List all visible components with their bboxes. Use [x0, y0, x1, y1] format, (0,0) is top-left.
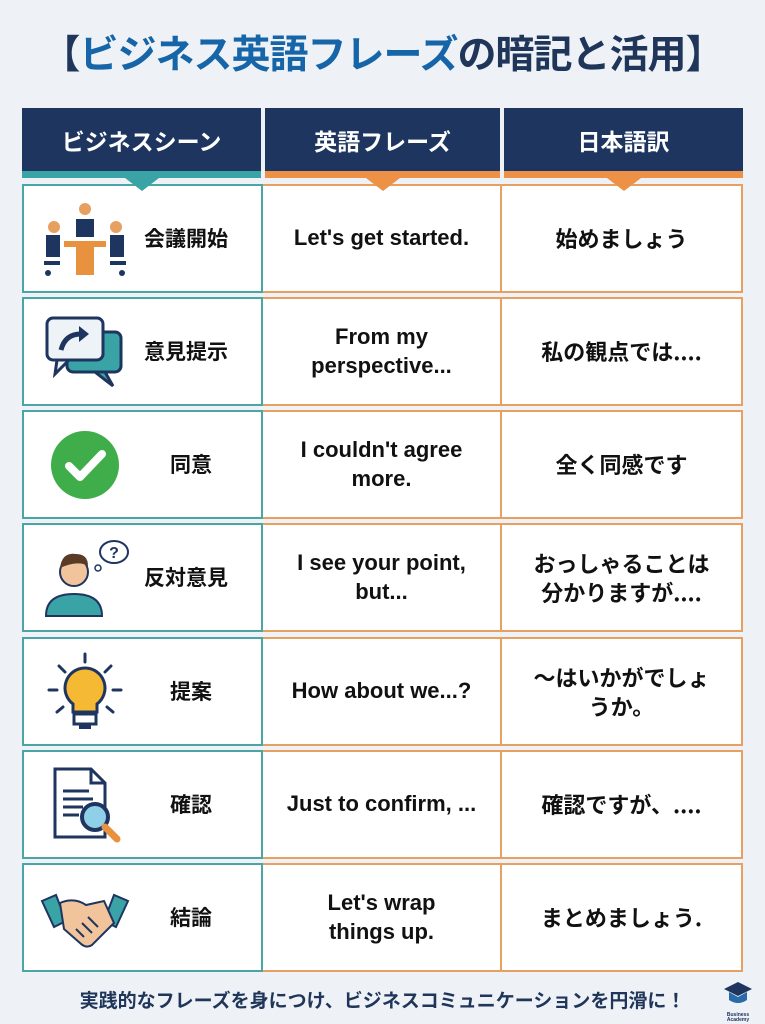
row 4 japanese: 分かりますが.... — [541, 576, 702, 608]
row 5 scene: 提案 — [170, 676, 212, 706]
icon: check — [51, 431, 119, 499]
row 5 japanese: ～はいかがでしょ — [533, 661, 710, 693]
row 5 scene — [22, 637, 263, 746]
row 4 scene — [22, 523, 263, 632]
row 6 scene — [22, 750, 263, 859]
icon: light bulb — [48, 652, 122, 729]
row 6 japanese: 確認ですが、.... — [541, 788, 702, 820]
row 4 japanese: おっしゃることは — [533, 547, 710, 579]
row 7 english: things up. — [329, 918, 434, 944]
row 7 scene — [22, 863, 263, 972]
row 7 japanese — [502, 863, 743, 972]
row 2 english: perspective... — [311, 352, 452, 378]
logo: Business Academy — [727, 1012, 749, 1023]
row 4 english — [263, 523, 502, 632]
row 1 japanese: 始めましょう — [555, 222, 688, 254]
row 1 english — [263, 184, 502, 293]
row 2 english: From my — [335, 324, 428, 349]
row 3 japanese: 全く同感です — [555, 448, 688, 480]
row 6 scene: 確認 — [170, 789, 212, 819]
row 6 english — [263, 750, 502, 859]
row 3 scene: 同意 — [170, 449, 212, 479]
row 2 english — [263, 297, 502, 406]
icon: person thinking: ? — [109, 544, 119, 562]
row 3 english: I couldn't agree — [301, 437, 462, 462]
icon: handshake — [40, 894, 130, 948]
icon: meeting — [44, 203, 126, 276]
row 5 japanese — [502, 637, 743, 746]
row 3 english: more. — [352, 466, 411, 490]
icon: speech bubbles — [46, 316, 122, 388]
row 3 japanese — [502, 410, 743, 519]
header: japanese: 日本語訳 — [578, 123, 670, 157]
row 5 english — [263, 637, 502, 746]
row 4 scene: 反対意見 — [144, 562, 228, 592]
header: english phrase — [265, 108, 500, 178]
icon: person thinking — [45, 540, 129, 617]
row 5 japanese: うか。 — [589, 690, 654, 722]
row 1 scene: 会議開始 — [144, 223, 228, 253]
icon: document magnifier — [54, 768, 120, 842]
row 5 english: How about we...? — [292, 678, 471, 703]
row 6 english: Just to confirm, ... — [287, 791, 476, 816]
row 1 japanese — [502, 184, 743, 293]
row 2 scene: 意見提示 — [144, 336, 228, 366]
logo — [724, 982, 752, 1023]
row 3 scene — [22, 410, 263, 519]
header: japanese — [504, 108, 743, 178]
header: english phrase: 英語フレーズ — [314, 123, 451, 157]
row 4 english: I see your point, — [297, 550, 466, 575]
row 7 english: Let's wrap — [328, 890, 435, 915]
row 1 english: Let's get started. — [294, 225, 469, 250]
row 2 scene — [22, 297, 263, 406]
header: business scene — [22, 108, 261, 178]
row 4 english: but... — [355, 578, 408, 604]
header: business scene: ビジネスシーン — [62, 123, 221, 157]
row 6 japanese — [502, 750, 743, 859]
title: 【ビジネス英語フレーズの暗記と活用】 — [41, 24, 724, 80]
row 3 english — [263, 410, 502, 519]
row 2 japanese: 私の観点では.... — [541, 335, 702, 367]
row 7 english — [263, 863, 502, 972]
row 7 japanese: まとめましょう. — [541, 901, 702, 933]
row 2 japanese — [502, 297, 743, 406]
row 7 scene: 結論 — [170, 902, 212, 932]
row 1 scene — [22, 184, 263, 293]
footer tagline: 実践的なフレーズを身につけ、ビジネスコミュニケーションを円滑に！ — [80, 986, 685, 1013]
row 4 japanese — [502, 523, 743, 632]
